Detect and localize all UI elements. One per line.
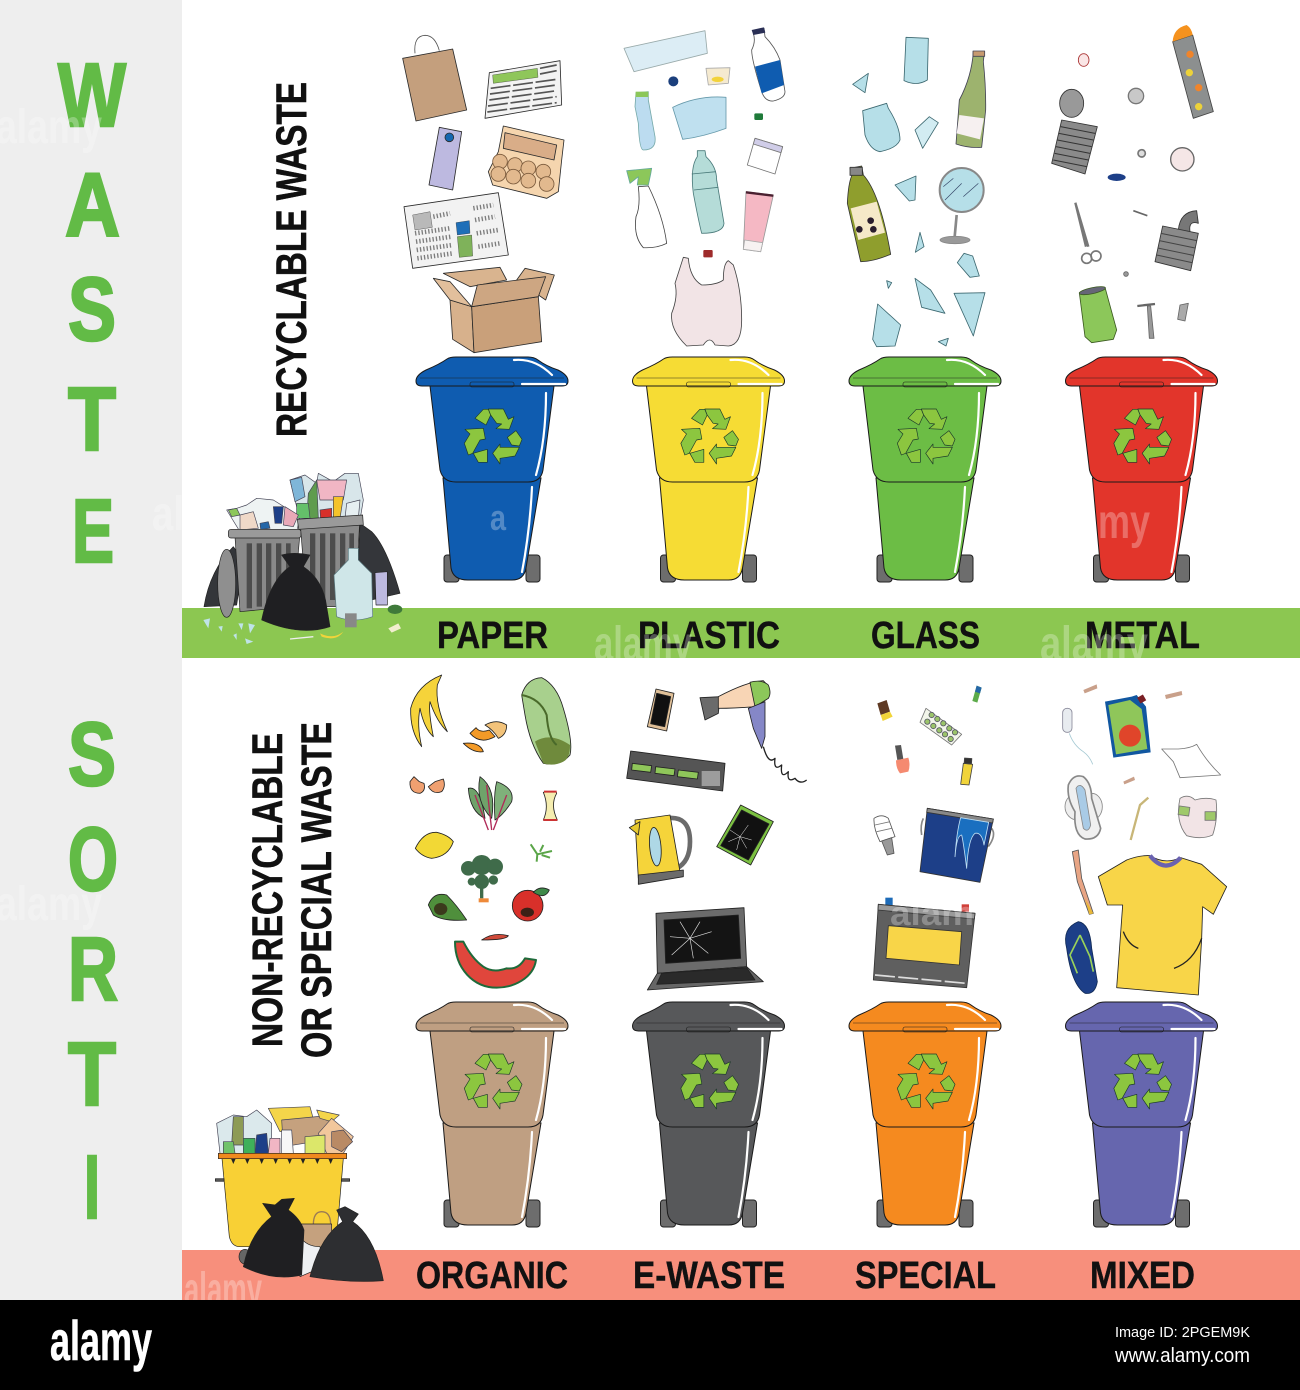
black bag left — [243, 1198, 304, 1277]
band labels: non-recyclable: SPECIAL — [855, 1255, 996, 1297]
olive oil bottle — [847, 166, 891, 262]
trash can large — [297, 515, 363, 607]
trash overflow — [227, 473, 363, 532]
watermarks: alam — [890, 895, 974, 933]
white bag — [298, 1237, 323, 1277]
green cap — [754, 113, 763, 120]
trash pile: recyclable — [203, 473, 402, 644]
heading: non-recyclable or special waste: OR SPECIAL WASTE — [293, 722, 341, 1058]
vertical title: WASTE SORTI: E — [72, 482, 114, 582]
watermarks: alamy — [1040, 618, 1148, 671]
trash can lid — [218, 549, 236, 617]
watermarks: alamy — [184, 1264, 262, 1317]
vertical title: WASTE SORTI: S — [68, 705, 116, 805]
lemon — [415, 832, 453, 858]
cigarette butts — [1083, 684, 1182, 784]
vertical title: WASTE SORTI: A — [65, 156, 120, 256]
broken laptop — [647, 908, 763, 990]
bin: plastic — [632, 357, 784, 582]
ketchup pouch — [1105, 694, 1151, 758]
ground litter — [203, 605, 402, 644]
bin: organic — [416, 1002, 568, 1227]
trash pile: container — [215, 1107, 383, 1281]
large water bottle — [692, 151, 724, 233]
metal disc — [1171, 148, 1194, 171]
sanitary pad — [1065, 776, 1102, 839]
small nut — [1138, 150, 1145, 157]
hair dryer — [700, 681, 807, 782]
egg carton — [488, 126, 564, 198]
watermarks — [0, 101, 1150, 1317]
blue oval lid — [1108, 174, 1126, 181]
nail polish — [895, 745, 909, 773]
band labels: non-recyclable: ORGANIC — [416, 1255, 568, 1297]
mirror — [940, 168, 984, 244]
bin: paper — [416, 357, 568, 582]
broken tablet — [717, 805, 773, 865]
wheel — [239, 1249, 251, 1264]
newspaper — [485, 61, 562, 118]
screw — [1133, 211, 1147, 216]
smartphone — [647, 689, 674, 731]
scissors — [1075, 203, 1101, 263]
green band — [182, 608, 1300, 658]
digital scale — [627, 751, 725, 791]
trash can small — [228, 529, 301, 612]
napa cabbage — [522, 678, 571, 765]
aerosol can — [1173, 25, 1213, 118]
overflowing trash — [217, 1107, 353, 1153]
footer logo: alamy — [50, 1309, 152, 1372]
watermarks: alamy — [0, 101, 102, 154]
open tin can — [1052, 89, 1097, 174]
lighter — [961, 758, 973, 785]
egg shells — [410, 777, 444, 793]
left black bag — [204, 547, 243, 607]
band labels: non-recyclable: E-WASTE — [633, 1255, 785, 1297]
vertical title: WASTE SORTI: W — [58, 46, 126, 146]
shards lower — [873, 232, 985, 347]
heading: non-recyclable or special waste — [244, 722, 341, 1058]
vertical title: WASTE SORTI: I — [84, 1138, 100, 1238]
bin: e-waste — [632, 1002, 784, 1227]
left title panel — [0, 0, 182, 1300]
band labels: non-recyclable: MIXED — [1090, 1255, 1195, 1297]
plastic bag — [672, 257, 742, 346]
items: organic and e-waste — [410, 675, 807, 990]
website: www.alamy.com — [1114, 1345, 1250, 1367]
water jug — [334, 548, 373, 620]
drinking glass — [904, 37, 928, 84]
shards upper — [853, 73, 938, 201]
bin: special — [849, 1002, 1001, 1227]
bin: glass — [849, 357, 1001, 582]
right black bag — [357, 523, 400, 603]
heading: non-recyclable or special waste: NON-RECYCLABLE — [244, 733, 292, 1047]
car battery — [873, 898, 975, 988]
red cap — [703, 250, 713, 257]
energy saving bulb — [874, 816, 895, 855]
items: special and mixed — [873, 684, 1227, 995]
chard — [468, 777, 512, 830]
bottle cap blue — [668, 76, 678, 86]
magazine — [404, 193, 508, 268]
glass jar — [863, 103, 900, 152]
apple core — [543, 791, 557, 820]
spray bottle — [627, 168, 667, 248]
washer — [1078, 54, 1089, 66]
band labels: recyclable: GLASS — [871, 615, 980, 657]
t-shirt — [1098, 856, 1227, 995]
diaper — [1178, 796, 1217, 838]
avocado — [428, 894, 467, 920]
vertical title: WASTE SORTI: T — [68, 1025, 116, 1125]
watermarks: alamy — [594, 618, 692, 671]
herb sprig — [531, 844, 552, 862]
orange peel — [463, 722, 507, 752]
pill blister — [920, 708, 962, 745]
band labels: non-recyclable — [416, 1255, 1195, 1297]
cardboard box — [433, 267, 554, 353]
milk bottle — [752, 27, 785, 101]
watermarks: a — [490, 497, 507, 538]
banana peel — [411, 675, 447, 747]
crumpled tissue — [1162, 744, 1221, 778]
watermarks: al — [152, 488, 184, 541]
drinking straw — [1131, 798, 1148, 840]
plastic wrap roll — [624, 31, 707, 72]
band labels: recyclable: METAL — [1085, 615, 1200, 657]
electric kettle — [629, 815, 690, 884]
flip-flop — [1066, 922, 1097, 994]
footer bar — [0, 1300, 1300, 1390]
razor — [1137, 304, 1155, 338]
paint bucket — [920, 808, 994, 882]
paper bag — [403, 35, 467, 121]
vertical title: WASTE SORTI: S — [68, 260, 116, 360]
vertical title: WASTE SORTI: R — [68, 920, 118, 1020]
bin: mixed — [1066, 1002, 1218, 1227]
bin: metal — [1066, 357, 1218, 582]
green soda can — [1079, 285, 1117, 343]
front black bag — [262, 553, 330, 630]
vertical title: WASTE SORTI: O — [68, 810, 118, 910]
wine bottle — [956, 51, 986, 148]
nut gear — [1128, 88, 1144, 104]
cream jar — [747, 138, 783, 174]
yellow container — [215, 1153, 350, 1247]
plastic tub — [673, 97, 726, 139]
apple — [512, 888, 549, 921]
vertical title: WASTE SORTI — [58, 46, 126, 1238]
small ball — [1124, 272, 1128, 276]
fruit scrap — [482, 934, 508, 940]
band labels: recyclable: PAPER — [437, 615, 548, 657]
items: paper and plastic — [403, 27, 785, 353]
items: glass and metal — [847, 25, 1213, 347]
yoghurt pot — [706, 68, 730, 85]
vertical title: WASTE SORTI: T — [68, 370, 116, 470]
image id: Image ID: 2PGEM9K — [1115, 1324, 1250, 1341]
band labels: recyclable: PLASTIC — [638, 615, 780, 657]
milk carton — [429, 127, 462, 190]
razor blade — [1178, 303, 1188, 321]
opened tin — [1155, 211, 1198, 271]
small water bottle — [635, 92, 655, 150]
carton — [375, 572, 387, 605]
pink band — [182, 1250, 1300, 1300]
band labels: recyclable — [437, 615, 1200, 657]
pink tube — [743, 192, 773, 252]
carrot greens — [461, 855, 503, 902]
pen cartridge — [972, 686, 982, 703]
watermarks: alamy — [0, 878, 102, 931]
watermelon rind — [455, 942, 536, 988]
kraft bag — [302, 1212, 332, 1254]
small bottle — [877, 700, 893, 721]
watermarks: my — [1098, 496, 1150, 549]
toothbrush — [1072, 850, 1093, 914]
tampon — [1063, 708, 1093, 764]
black bag right — [310, 1207, 383, 1281]
